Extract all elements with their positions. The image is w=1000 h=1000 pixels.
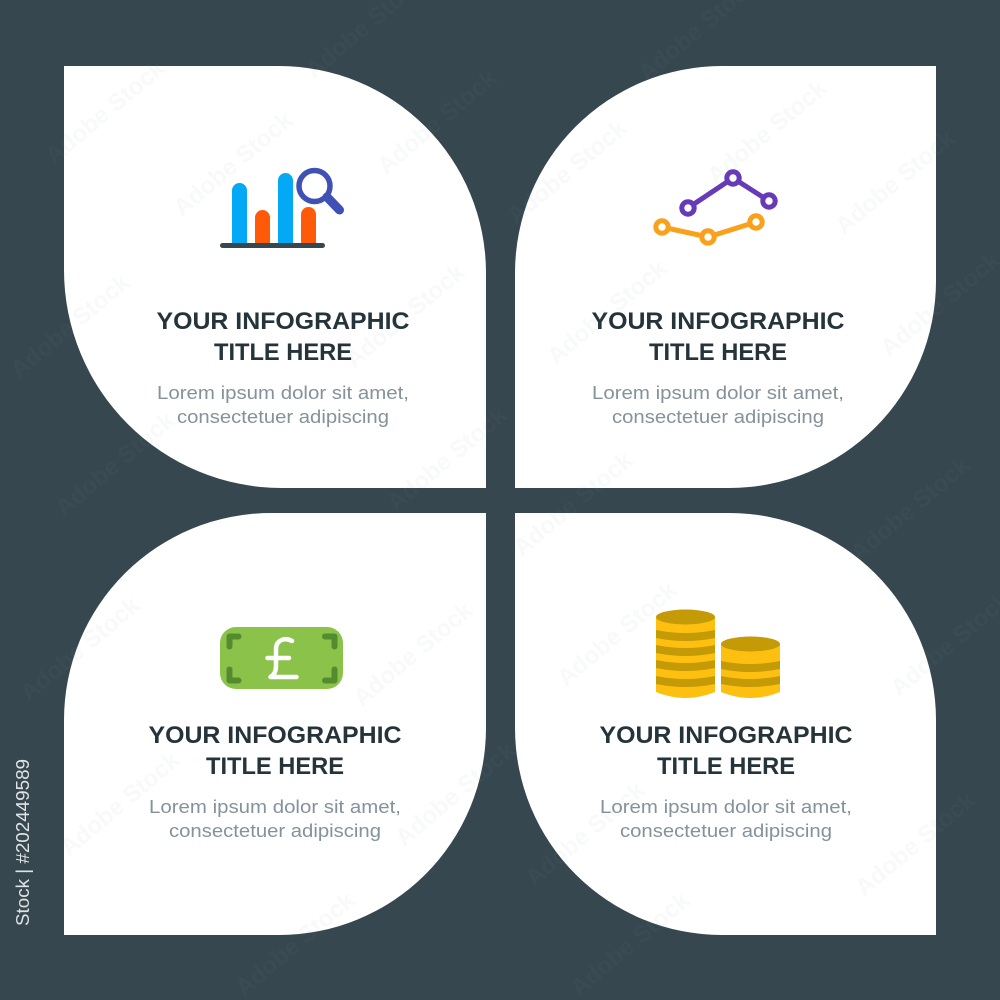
body text: top right (592, 382, 844, 427)
title: top left: YOUR INFOGRAPHIC (156, 308, 410, 335)
icon: pound banknote (220, 627, 343, 689)
title: bottom left: TITLE HERE (206, 753, 344, 780)
watermark pattern: Adobe Stock (565, 886, 696, 1000)
watermark pattern: Adobe Stock (552, 576, 683, 692)
body text: bottom right: consectetuer adipiscing (620, 820, 832, 841)
stock id label: Stock | #202449589 (13, 759, 33, 926)
body text: top left: Lorem ipsum dolor sit amet, (157, 382, 409, 403)
title: top right (592, 308, 844, 366)
icon: coin stacks (656, 610, 780, 698)
body text: top right: consectetuer adipiscing (612, 406, 824, 427)
body text: bottom right: Lorem ipsum dolor sit amet, (600, 796, 852, 817)
watermark pattern: Adobe Stock (830, 124, 961, 240)
watermark pattern: Adobe Stock (168, 106, 299, 222)
watermark pattern: Adobe Stock (372, 64, 503, 180)
title: top right: TITLE HERE (649, 339, 787, 366)
watermark pattern: Adobe Stock (508, 446, 639, 562)
title: bottom right (600, 722, 852, 780)
title: top left (156, 308, 410, 366)
watermark pattern: Adobe Stock (340, 258, 471, 374)
body text: top left (157, 382, 409, 427)
watermark pattern: Adobe Stock (55, 746, 186, 862)
watermark pattern: Adobe Stock (390, 736, 521, 852)
watermark pattern: Adobe Stock (50, 406, 181, 522)
title: bottom left: YOUR INFOGRAPHIC (148, 722, 402, 749)
body text: bottom left: consectetuer adipiscing (169, 820, 381, 841)
icon: line chart (656, 172, 775, 243)
body text: bottom left (149, 796, 401, 841)
title: bottom left (148, 722, 402, 780)
body text: top right: Lorem ipsum dolor sit amet, (592, 382, 844, 403)
watermark pattern: Adobe Stock (5, 268, 136, 384)
watermark pattern: Adobe Stock (230, 886, 361, 1000)
panel: bottom left (64, 513, 486, 935)
watermark pattern: Adobe Stock (502, 114, 633, 230)
watermark pattern: Adobe Stock (520, 776, 651, 892)
watermark pattern: Adobe Stock (845, 451, 976, 567)
body text: bottom right (600, 796, 852, 841)
watermark pattern: Adobe Stock (542, 254, 673, 370)
icon: bar chart with magnifier (220, 170, 340, 248)
watermark pattern: Adobe Stock (15, 591, 146, 707)
title: top left: TITLE HERE (214, 339, 352, 366)
watermark pattern: Adobe Stock (850, 786, 981, 902)
watermark pattern: Adobe Stock (702, 74, 833, 190)
watermark pattern: Adobe Stock (348, 596, 479, 712)
title: bottom right: YOUR INFOGRAPHIC (600, 722, 852, 749)
panel: top left (64, 66, 486, 488)
title: top right: YOUR INFOGRAPHIC (592, 308, 844, 335)
watermark pattern: Adobe Stock (40, 54, 171, 170)
body text: bottom left: Lorem ipsum dolor sit amet, (149, 796, 401, 817)
panel: top right (515, 66, 936, 488)
watermark pattern: Adobe Stock (382, 401, 513, 517)
body text: top left: consectetuer adipiscing (177, 406, 389, 427)
panel: bottom right (515, 513, 936, 935)
title: bottom right: TITLE HERE (657, 753, 795, 780)
